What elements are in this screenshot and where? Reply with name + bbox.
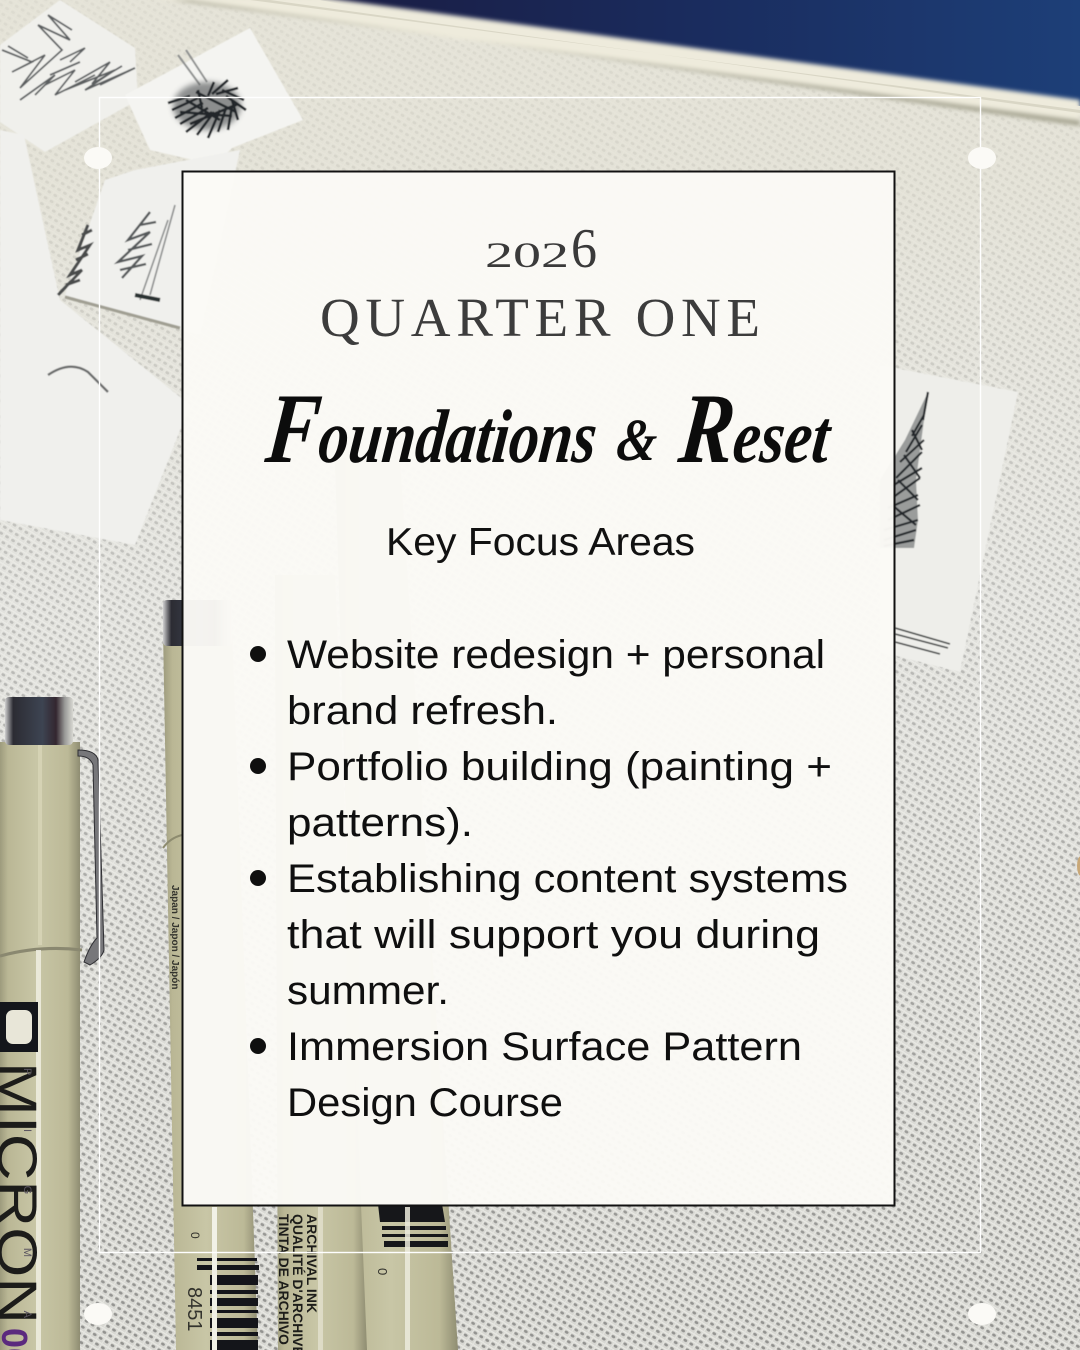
pen: front center: Japan / Japon / Japón [169,885,180,989]
bullet: content systems: that will support you during [287,913,820,957]
background: sketch cards [0,0,1018,672]
pen: rear [335,460,458,1350]
title: quarter one: QUARTER ONE [320,287,760,348]
pen: middle [275,575,367,1350]
bullet: course [250,1025,802,1125]
panel: main text card [182,172,894,1206]
bullet: portfolio [250,745,832,845]
background: pens [0,460,458,1350]
card: lower left curve [48,367,108,392]
script heading: Reset [674,373,839,484]
bullet: portfolio: patterns). [287,801,473,845]
bullet: website: Website redesign + personal [287,633,825,677]
card: tree sketch middle [58,150,240,335]
background: navy board and cream frame edge [150,0,1080,126]
script heading: Foundations [261,373,603,484]
subheading: Key Focus Areas [386,521,695,564]
year heading: 6 [571,218,597,280]
pen: left Micron [0,697,104,1350]
list: key focus areas [250,633,848,1125]
pen: front center: 8451 [183,1287,205,1332]
pen: front center: 0 [188,1232,202,1239]
bullet: content systems [250,857,848,1013]
script heading: & [614,407,661,474]
pen: rear: 0 [375,1268,390,1275]
card: tree right side [880,365,1018,672]
bullet: course: Design Course [287,1081,563,1125]
year heading: 202 [485,235,569,275]
card: pine tree top [125,28,303,165]
frame dots: four white ovals [84,147,996,1325]
bullet: website: brand refresh. [287,689,558,733]
pen: middle: TINTA DE ARCHIVO [276,1214,292,1345]
bullet: website [250,633,825,733]
year heading [485,218,597,280]
pen: front center [163,600,259,1350]
bullet: course: Immersion Surface Pattern [287,1025,802,1069]
background: tan object at right edge [1077,856,1080,876]
bullet: content systems: Establishing content systems [287,857,848,901]
card: white sheet left [0,130,190,545]
frame: thin white outline [100,98,980,1252]
bullet: content systems: summer. [287,969,449,1013]
bullet: portfolio: Portfolio building (painting + [287,745,832,789]
card: upper left sketch [0,0,138,152]
pen: middle: ARCHIVAL INK [304,1214,320,1313]
pen: left Micron: PIGMA [21,1068,33,1319]
